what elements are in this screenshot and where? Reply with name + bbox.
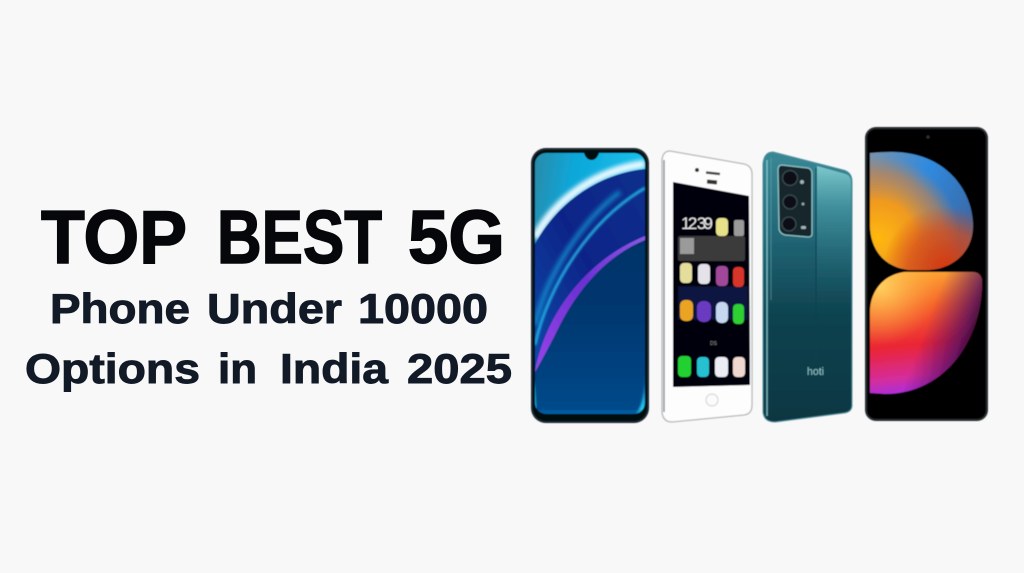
subtitle: options in India 2025: in <box>218 345 257 392</box>
widget icons <box>716 218 728 236</box>
icon: front camera <box>926 135 930 139</box>
subtitle: phone under 10000: Under <box>207 285 342 332</box>
subtitle: options in India 2025: 2025 <box>407 345 512 392</box>
subtitle: options in India 2025 <box>25 345 512 392</box>
app band <box>678 286 748 320</box>
app dock <box>678 356 745 377</box>
subtitle: options in India 2025: Options <box>25 345 200 392</box>
phone 1: blue wave front view <box>531 148 649 423</box>
brand mark: hoti <box>807 366 824 378</box>
title: top best 5G: BEST <box>217 195 382 279</box>
screen <box>673 182 750 387</box>
phone 4: black screen with gradient shapes <box>865 127 988 421</box>
subtitle: options in India 2025: India <box>280 345 389 392</box>
icon: notch <box>584 153 599 160</box>
title: top best 5G: 5G <box>408 195 505 279</box>
clock: 12 39 <box>681 214 713 233</box>
subtitle: phone under 10000: Phone <box>50 285 190 332</box>
title: top best 5G: TOP <box>41 195 187 279</box>
phone 2: white smartphone with app grid: DS <box>710 341 718 347</box>
phone 3: teal back view <box>763 152 852 422</box>
title: top best 5G <box>41 195 505 279</box>
subtitle: phone under 10000 <box>50 285 488 332</box>
lower gradient shape <box>870 272 982 394</box>
home button <box>706 394 718 406</box>
phone 2: white smartphone with app grid <box>662 151 752 422</box>
subtitle: phone under 10000: 10000 <box>358 285 488 332</box>
app row one <box>680 263 744 287</box>
app row two <box>680 300 744 324</box>
upper gradient shape <box>870 152 974 271</box>
camera module <box>778 165 812 237</box>
